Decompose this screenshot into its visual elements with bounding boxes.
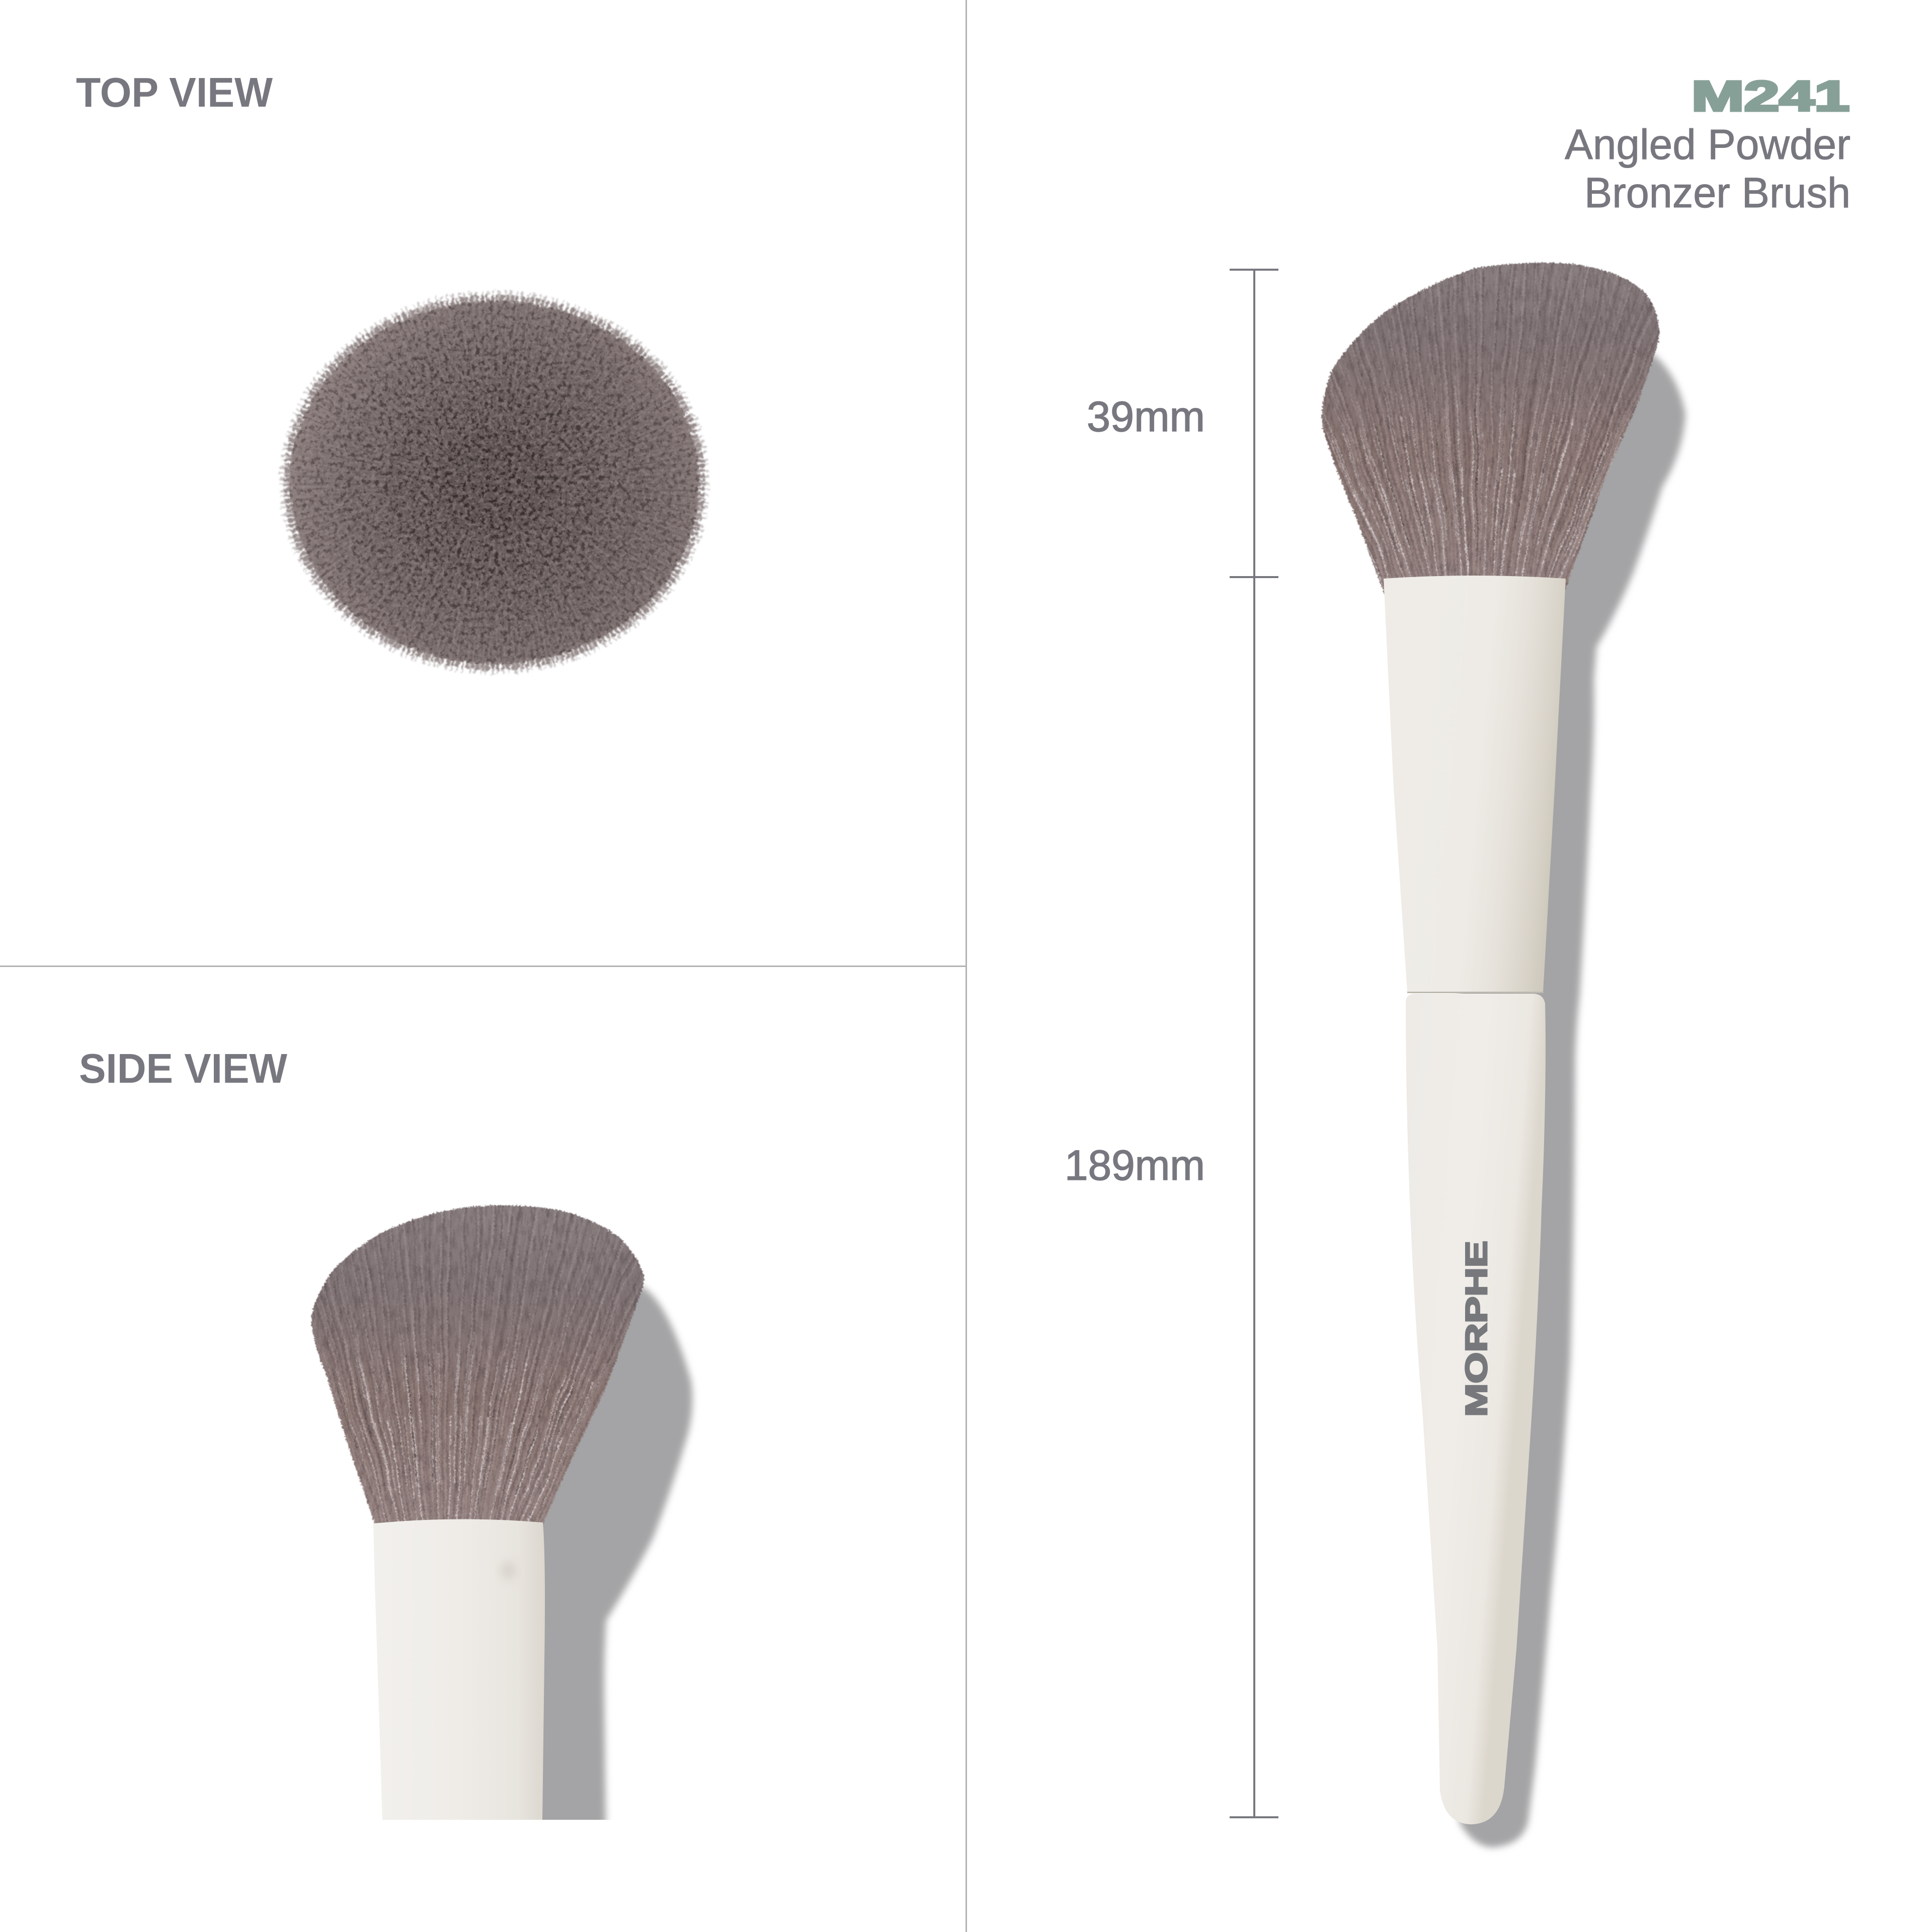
dimension scale [1230, 270, 1278, 1817]
handle [1406, 994, 1546, 1824]
panel: side view [79, 1045, 702, 1862]
horizontal panel divider [0, 965, 966, 967]
measurement: handle length: 189mm [1065, 1142, 1205, 1189]
side view ferrule [373, 1519, 545, 1820]
measurement: bristle length: 39mm [1087, 393, 1205, 440]
cast shadow of side view brush [503, 1286, 692, 1862]
vertical panel divider [965, 0, 967, 1932]
radial bristle strokes [272, 282, 719, 684]
heading: side view: SIDE VIEW [79, 1045, 288, 1092]
product name: Angled Powder [1565, 121, 1850, 168]
product name [1565, 121, 1850, 216]
panel: full brush with measurements [1065, 72, 1850, 1847]
bristle mass [290, 301, 699, 664]
bristles [1218, 242, 1735, 594]
dark gaps near the centre [272, 282, 719, 684]
light fibre flecks [272, 282, 719, 684]
product code: M241 [1692, 72, 1849, 120]
ferrule [1384, 576, 1566, 992]
brush head seen from above [272, 282, 719, 684]
full brush [1218, 242, 1735, 1824]
panel: top view [76, 69, 719, 684]
fuzzy outer bristle ring [289, 300, 700, 665]
ferrule and handle joint [1407, 992, 1544, 993]
all-over bristle shadow texture [272, 282, 719, 684]
side view bristles [185, 1187, 702, 1540]
handle logo: MORPHE [1460, 1241, 1493, 1417]
smudge on ferrule [504, 1564, 513, 1578]
cast shadow of full brush [1459, 353, 1685, 1847]
heading: top view: TOP VIEW [76, 69, 273, 116]
product name: Bronzer Brush [1584, 169, 1850, 216]
